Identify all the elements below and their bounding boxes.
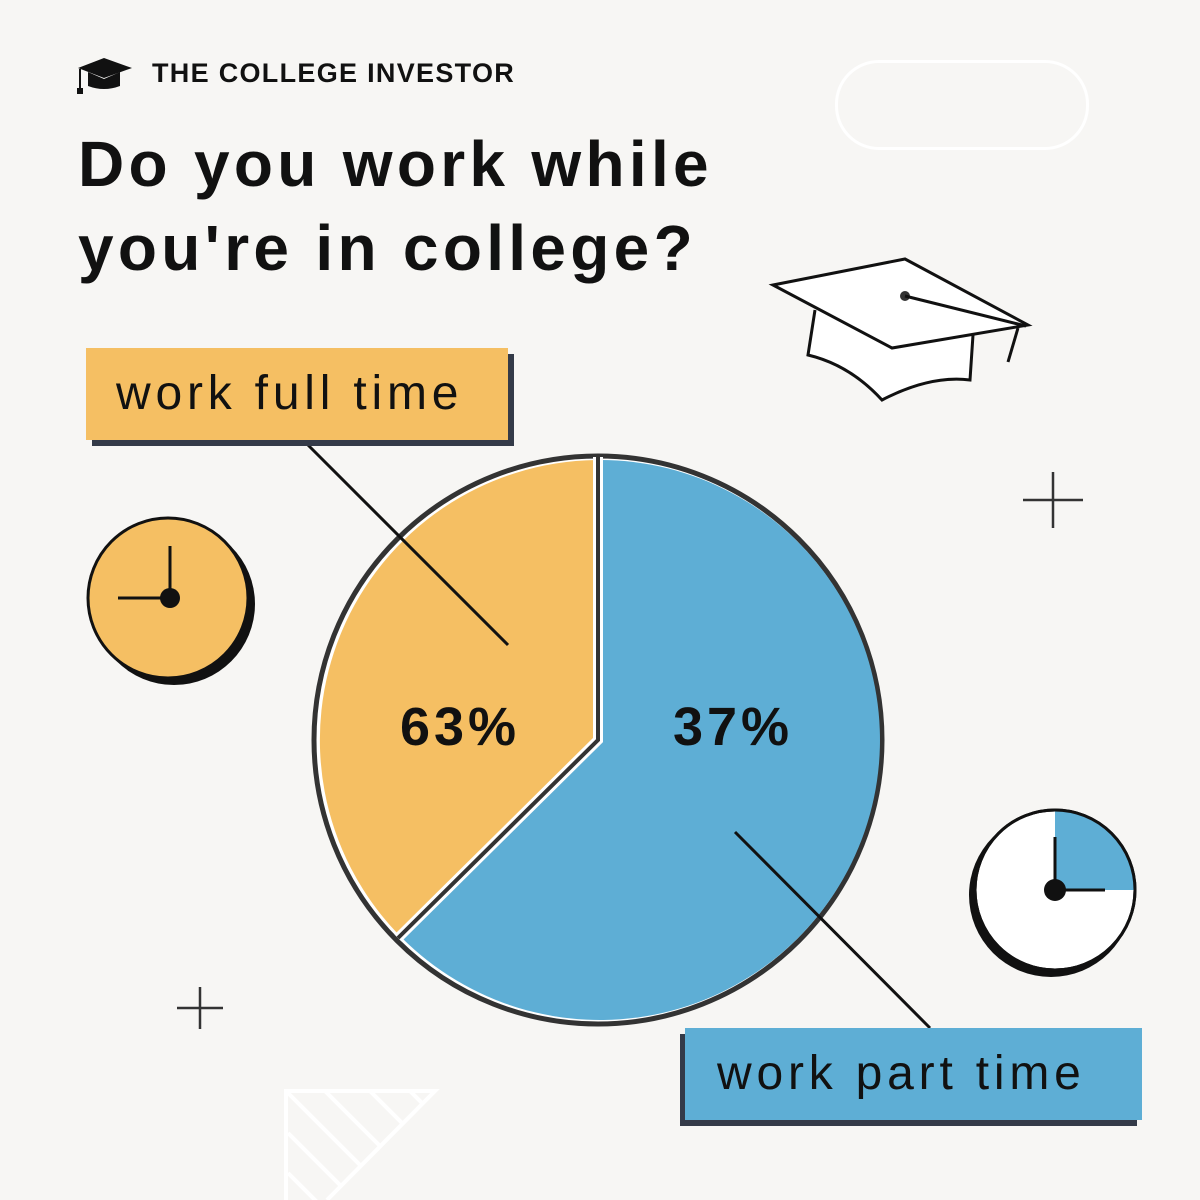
- icon: plus left: [177, 987, 223, 1029]
- icon: white clock with blue quarter: [969, 808, 1136, 977]
- label: work full time: work full time: [116, 367, 463, 420]
- percentage: 63%: 63%: [400, 697, 520, 757]
- pie slice: full time yellow: [320, 460, 596, 934]
- label: work full time: [86, 348, 508, 440]
- decorative hatched triangle: [284, 1089, 440, 1200]
- title: you're in college?: [78, 212, 697, 284]
- percentage: 37%: 37%: [673, 697, 793, 757]
- decorative rounded rectangle outline: [835, 60, 1089, 150]
- label: work part time: [685, 1028, 1142, 1120]
- pie slice: part time blue: [402, 460, 880, 1020]
- logo: THE COLLEGE INVESTOR: [152, 58, 515, 88]
- pie chart: [312, 454, 884, 1026]
- label: work part time: work part time: [717, 1047, 1086, 1100]
- logo: [77, 58, 515, 94]
- title: Do you work while: [78, 128, 713, 200]
- icon: yellow clock: [86, 516, 255, 685]
- icon: plus right: [1023, 472, 1083, 528]
- title: [78, 128, 713, 284]
- icon: graduation cap: [768, 257, 1032, 402]
